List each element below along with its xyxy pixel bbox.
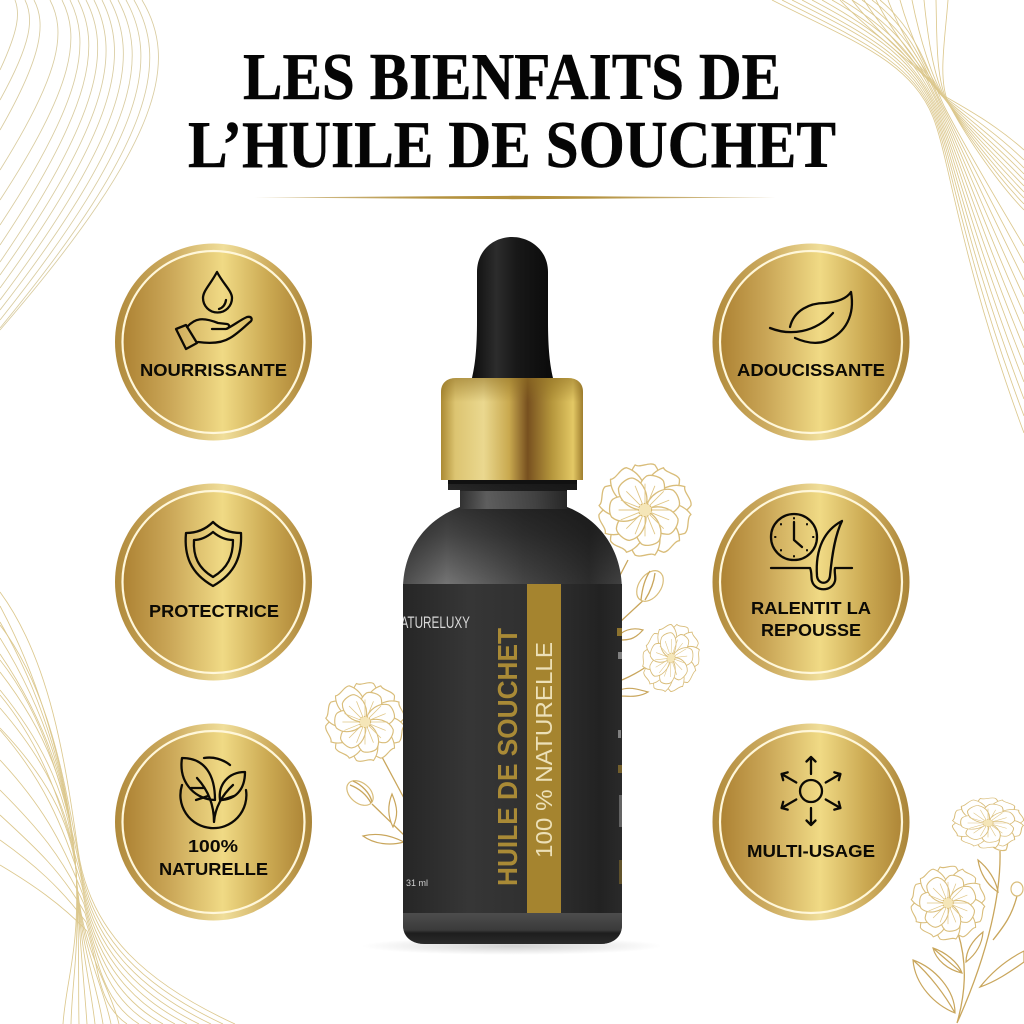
badge: 100% naturelle: 100%	[188, 836, 238, 856]
badge: 100% naturelle: NATURELLE	[159, 859, 268, 879]
illustration: flowers behind the bottle	[324, 464, 710, 844]
badge: multi-usage: MULTI-USAGE	[747, 841, 875, 861]
icon: shield	[186, 522, 241, 586]
bottle	[392, 237, 622, 944]
bottle shadow	[362, 937, 662, 955]
badge: 100% naturelle	[115, 724, 312, 920]
icon: leaf	[770, 292, 852, 343]
badge: ralentit la repousse: REPOUSSE	[761, 620, 861, 640]
volume: 31 ml	[406, 878, 428, 888]
title: LES BIENFAITS DE	[243, 40, 781, 114]
product name: HUILE DE SOUCHET	[492, 628, 523, 886]
bottle label	[403, 584, 622, 913]
badge: ralentit la repousse: RALENTIT LA	[751, 598, 871, 618]
natural tagline: 100 % NATURELLE	[531, 642, 557, 858]
decoration: bottom-left gold lines	[0, 592, 235, 1024]
badge: adoucissante	[712, 244, 910, 440]
bottle foot	[403, 913, 622, 944]
illustration: flowers bottom right	[909, 798, 1024, 1023]
badge: multi-usage	[712, 724, 910, 920]
gold band	[527, 584, 561, 913]
title underline	[248, 196, 776, 199]
bottle glass body	[403, 480, 622, 944]
badge: nourrissante	[115, 244, 312, 440]
title: L’HUILE DE SOUCHET	[188, 108, 836, 182]
dropper bulb	[472, 237, 553, 378]
icon: clock and hair follicle	[771, 514, 852, 589]
icon: plant in circle	[180, 758, 246, 828]
badge: protectrice	[115, 484, 312, 680]
badge: ralentit la repousse	[712, 484, 910, 680]
title	[188, 40, 836, 182]
badge: protectrice: PROTECTRICE	[149, 601, 279, 621]
brand text: NATURELUXY	[392, 613, 470, 632]
badge: adoucissante: ADOUCISSANTE	[737, 360, 885, 380]
decoration: top-left gold lines	[0, 0, 158, 330]
decoration: top-right gold lines	[772, 0, 1024, 433]
gold collar	[441, 378, 583, 480]
icon: drop and hand	[176, 272, 252, 349]
badge: nourrissante: NOURRISSANTE	[140, 360, 287, 380]
icon: radiating arrows	[779, 757, 843, 825]
side panel small print	[617, 628, 622, 884]
